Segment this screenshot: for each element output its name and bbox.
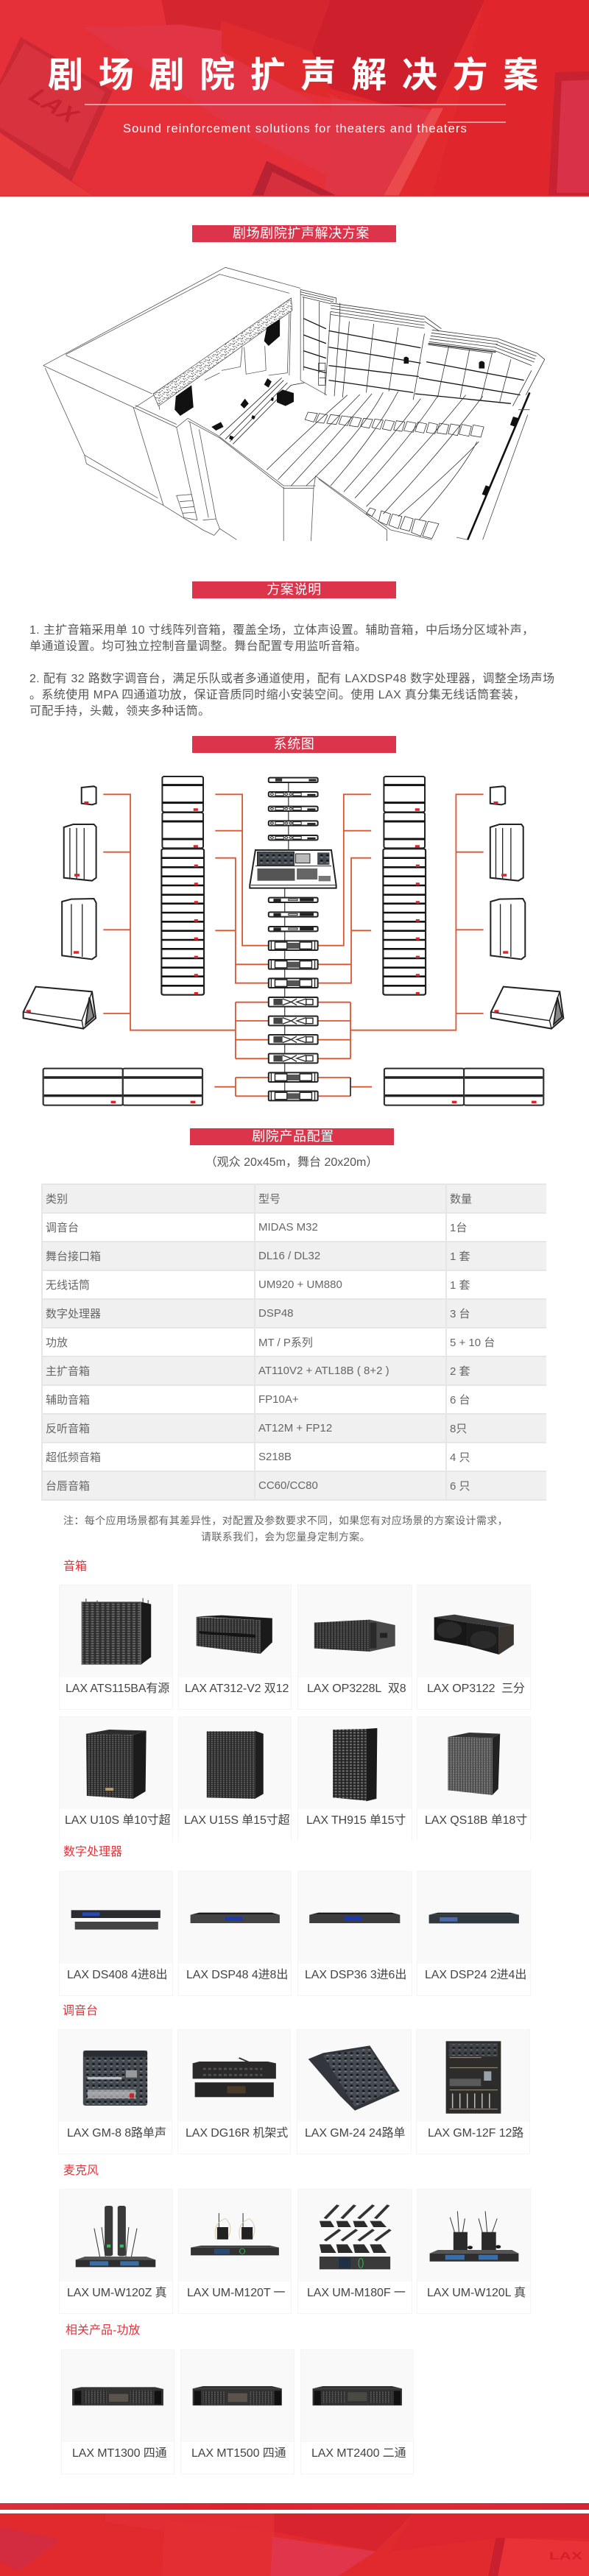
product: QS18B	[417, 1716, 531, 1841]
product: OP3228L	[297, 1585, 412, 1710]
product: GM-12F	[416, 2029, 530, 2154]
paragraph 2: 2. 配有 32 路数字调音台，满足乐队或者多通道使用，配有 LAXDSP48 数字处理器，调整全场声场	[29, 673, 555, 685]
header divider long	[85, 104, 506, 105]
configuration note: 注：每个应用场景都有其差异性，对配置及参数要求不同，如果您有对应场景的方案设计需求，	[63, 1515, 508, 1526]
product: ATS115BA	[59, 1585, 173, 1710]
product configuration table: 1 套	[450, 1250, 470, 1263]
product: DSP24	[417, 1871, 531, 1996]
product: TH915: LAX TH915 单15寸	[306, 1814, 406, 1827]
mixing console	[250, 850, 336, 888]
line array right	[383, 776, 426, 995]
section title: related amplifiers: 相关产品-功放	[66, 2324, 140, 2337]
configuration note	[63, 1515, 508, 1543]
product: DS408	[59, 1871, 173, 1996]
header subtitle: Sound reinforcement solutions for theaters and theaters	[123, 121, 468, 135]
product: UM-M120T	[178, 2189, 292, 2314]
product: GM-8	[58, 2029, 172, 2154]
product: DSP36	[297, 1871, 412, 1996]
logo mark: LAX	[21, 85, 85, 127]
product: MT2400: LAX MT2400 二通	[311, 2447, 406, 2460]
product grid: microphones	[59, 2189, 531, 2314]
product: DG16R: LAX DG16R 机架式	[186, 2127, 288, 2140]
product: U10S: LAX U10S 单10寸超	[65, 1814, 171, 1827]
product: UM-M180F: LAX UM-M180F 一	[307, 2287, 406, 2299]
paragraph 1: 1. 主扩音箱采用单 10 寸线阵列音箱，覆盖全场，立体声设置。辅助音箱，中后场分区域补声，	[29, 624, 535, 637]
auxiliary speakers right	[490, 786, 563, 1029]
product configuration table: 1台	[450, 1222, 467, 1234]
product configuration table: 6 只	[450, 1480, 470, 1493]
line array left	[161, 776, 204, 995]
theatre line drawing	[43, 266, 545, 541]
product configuration table: MIDAS M32	[258, 1221, 318, 1234]
product configuration table: 3 台	[450, 1308, 470, 1320]
product: U15S: LAX U15S 单15寸超	[184, 1814, 290, 1827]
auditorium wall	[300, 289, 545, 406]
section title: mixers: 调音台	[63, 2005, 98, 2017]
product: GM-12F: LAX GM-12F 12路	[428, 2127, 523, 2140]
product configuration table: 4 只	[450, 1451, 470, 1464]
product configuration table: 主扩音箱	[46, 1365, 90, 1378]
product grid: amplifiers	[61, 2349, 414, 2474]
scheme description text	[29, 623, 555, 718]
product: MT1500: LAX MT1500 四通	[191, 2447, 286, 2460]
product configuration table: 辅助音箱	[46, 1394, 90, 1406]
product: U10S	[59, 1716, 173, 1841]
product configuration table: 台唇音箱	[46, 1480, 90, 1493]
paragraph 1	[29, 623, 535, 653]
product: U15S	[178, 1716, 292, 1841]
product configuration table: 无线话筒	[46, 1279, 90, 1292]
product configuration table: 8只	[450, 1423, 467, 1435]
product: UM-W120Z	[59, 2189, 173, 2314]
product configuration table: 数量	[450, 1193, 472, 1206]
right side rail	[468, 392, 529, 539]
subwoofers right	[384, 1069, 543, 1105]
section title: digital processors: 数字处理器	[63, 1846, 122, 1858]
product configuration table: 5 + 10 台	[450, 1337, 495, 1349]
footer logo mark: LAX	[549, 2550, 582, 2562]
product: UM-W120L: LAX UM-W120L 真	[427, 2287, 526, 2299]
heading: system diagram	[192, 736, 396, 753]
product configuration table: DL16 / DL32	[258, 1250, 320, 1262]
speaker brand marks	[27, 803, 508, 1011]
product: OP3228L: LAX OP3228L 双8	[307, 1682, 406, 1695]
product grid: speakers	[59, 1585, 531, 1841]
product: MT1500	[180, 2349, 294, 2474]
section title: microphones: 麦克风	[63, 2165, 99, 2177]
product grid: digital processors	[59, 1871, 531, 1996]
product: GM-8: LAX GM-8 8路单声	[67, 2127, 166, 2140]
product configuration table: 舞台接口箱	[46, 1250, 101, 1263]
stage speakers	[174, 319, 484, 440]
auditorium seats	[267, 392, 484, 539]
product: TH915	[297, 1716, 412, 1841]
connection lines	[103, 794, 484, 1096]
product: AT312-V2: LAX AT312-V2 双12	[185, 1682, 289, 1695]
product configuration table: MT / P系列	[258, 1337, 313, 1349]
heading: scheme description	[192, 581, 396, 598]
product: OP3122	[417, 1585, 531, 1710]
product configuration table: 超低频音箱	[46, 1451, 101, 1464]
center devices	[269, 778, 318, 1100]
product configuration table	[41, 1183, 546, 1501]
subwoofers left	[43, 1069, 202, 1105]
product configuration table: FP10A+	[258, 1393, 299, 1406]
product configuration table: 功放	[46, 1337, 68, 1349]
section title: speakers: 音箱	[63, 1560, 87, 1573]
product: UM-W120L	[417, 2189, 531, 2314]
product configuration table: 数字处理器	[46, 1308, 101, 1320]
product configuration table: 2 套	[450, 1365, 470, 1378]
product: DSP36: LAX DSP36 3进6出	[305, 1969, 406, 1981]
product configuration table: AT12M + FP12	[258, 1422, 332, 1434]
product: DG16R	[177, 2029, 291, 2154]
product configuration table: UM920 + UM880	[258, 1278, 342, 1291]
paragraph 1: 单通道设置。均可独立控制音量调整。舞台配置专用监听音箱。	[29, 640, 367, 653]
configuration note: 请联系我们，会为您量身定制方案。	[201, 1531, 370, 1543]
subwoofer brand marks	[111, 1101, 537, 1103]
product: ATS115BA: LAX ATS115BA有源	[66, 1682, 169, 1695]
footer banner	[0, 2513, 589, 2576]
product configuration table: 反听音箱	[46, 1423, 90, 1435]
product: MT2400	[300, 2349, 414, 2474]
product: DSP24: LAX DSP24 2进4出	[425, 1969, 526, 1981]
header banner	[0, 0, 589, 197]
product configuration table: 类别	[46, 1193, 68, 1206]
heading: theatre solution: 剧场剧院扩声解决方案	[233, 226, 370, 241]
product: MT1300	[61, 2349, 174, 2474]
product: QS18B: LAX QS18B 单18寸	[425, 1814, 527, 1827]
product configuration table: CC60/CC80	[258, 1479, 318, 1492]
product configuration table: S218B	[258, 1451, 292, 1463]
paragraph 2: 可配手持，头戴，领夹多种话筒。	[29, 705, 211, 718]
product: OP3122: LAX OP3122 三分	[427, 1682, 525, 1695]
stage truss	[153, 298, 292, 406]
heading: theatre solution	[192, 225, 396, 242]
product configuration table: 6 台	[450, 1394, 470, 1406]
product configuration table: 1 套	[450, 1279, 470, 1292]
product configuration table: DSP48	[258, 1307, 294, 1320]
product: DS408: LAX DS408 4进8出	[67, 1969, 167, 1981]
product: DSP48: LAX DSP48 4进8出	[186, 1969, 288, 1981]
header title: 剧场剧院扩声解决方案	[48, 56, 554, 95]
system diagram	[22, 776, 564, 1106]
product: GM-24	[297, 2029, 412, 2154]
header divider short	[448, 121, 506, 123]
footer stripe	[0, 2503, 589, 2510]
product configuration table: 型号	[258, 1193, 281, 1206]
heading: product configuration	[190, 1128, 394, 1145]
product configuration table: AT110V2 + ATL18B ( 8+2 )	[258, 1365, 389, 1377]
product configuration table: 调音台	[46, 1222, 79, 1234]
product grid: mixers	[58, 2029, 530, 2154]
signal chain center line	[285, 780, 289, 1097]
paragraph 2	[29, 672, 555, 718]
product: DSP48	[178, 1871, 292, 1996]
product: MT1300: LAX MT1300 四通	[72, 2447, 167, 2460]
product: UM-W120Z: LAX UM-W120Z 真	[67, 2287, 167, 2299]
heading: product configuration: 剧院产品配置	[252, 1129, 334, 1144]
paragraph 2: 。系统使用 MPA 四通道功放，保证音质同时缩小安装空间。使用 LAX 真分集无线话筒套装，	[29, 689, 526, 701]
product: UM-M120T: LAX UM-M120T 一	[187, 2287, 285, 2299]
audience and stage size caption: （观众 20x45m，舞台 20x20m）	[205, 1156, 378, 1169]
product: GM-24: LAX GM-24 24路单	[305, 2127, 405, 2140]
product: AT312-V2	[178, 1585, 292, 1710]
auxiliary speakers left	[24, 786, 96, 1029]
heading: scheme description: 方案说明	[267, 582, 322, 597]
product: UM-M180F	[297, 2189, 412, 2314]
heading: system diagram: 系统图	[274, 737, 314, 751]
